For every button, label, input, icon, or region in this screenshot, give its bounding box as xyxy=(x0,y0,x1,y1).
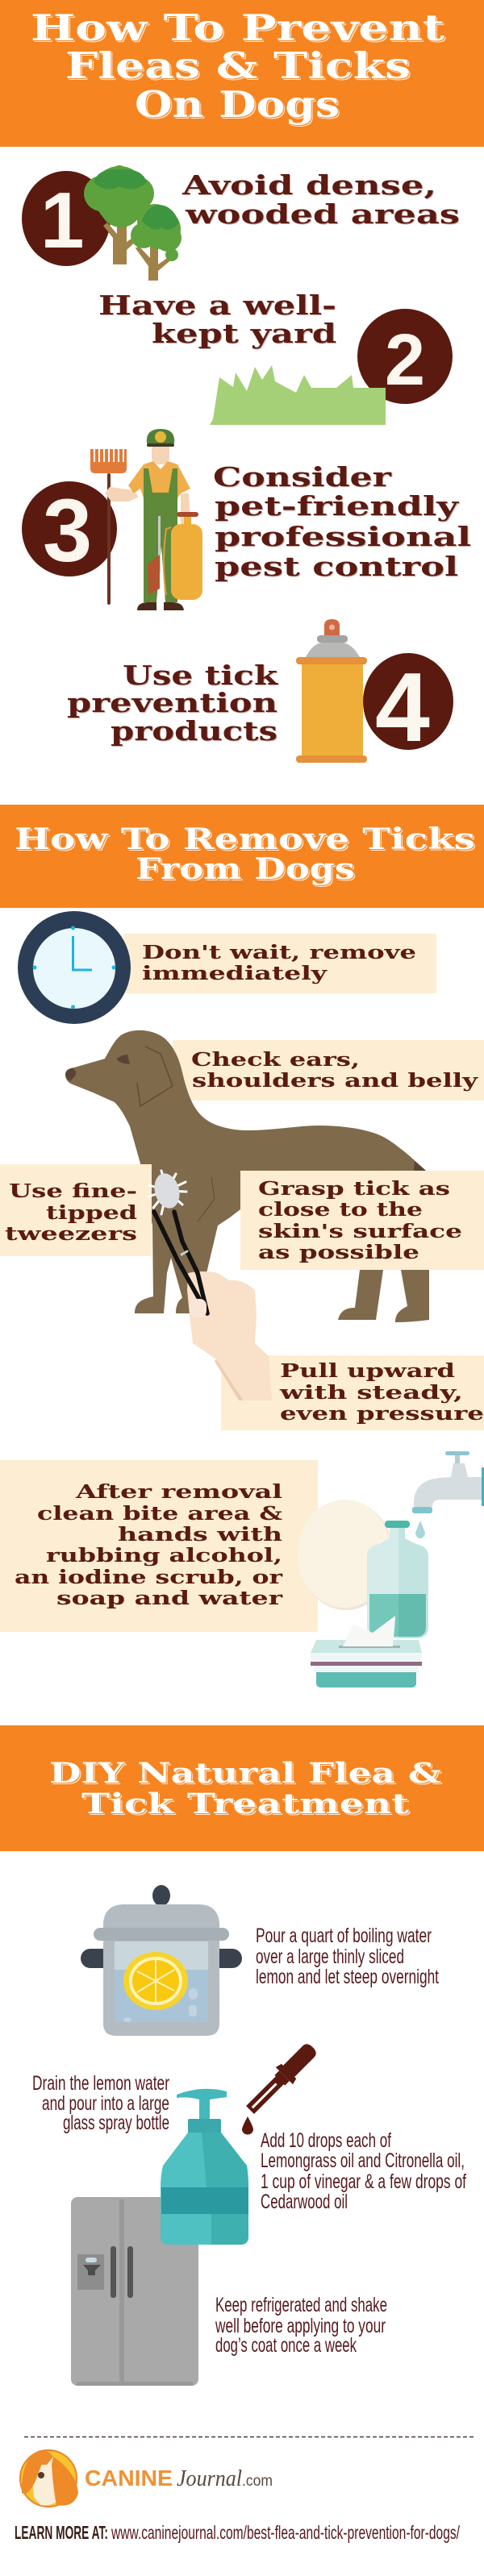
header: DIY treatment xyxy=(0,1725,484,1851)
step 3 text xyxy=(213,461,471,582)
callout: pull upward text: Pull upward xyxy=(280,1360,455,1382)
text: keep refrigerated xyxy=(215,2294,387,2357)
number badge 3 xyxy=(22,481,117,581)
text: drain lemon water: Drain the lemon water xyxy=(32,2072,169,2095)
title xyxy=(15,822,475,886)
callout: check ears text xyxy=(191,1049,478,1092)
callout: don't wait: immediately xyxy=(142,963,328,984)
text: pour boiling water xyxy=(256,1925,439,1988)
icon: spray can xyxy=(296,619,367,763)
logo: Canine Journal: CANINE xyxy=(85,2466,173,2491)
step 4 text: products xyxy=(111,715,277,747)
callout: after removal: clean bite area & xyxy=(37,1503,282,1525)
step 2 text: kept yard xyxy=(152,318,336,349)
tissue box xyxy=(311,1616,422,1688)
title: How To Remove Ticks xyxy=(15,822,475,856)
number badge 2 xyxy=(357,309,453,404)
callout: fine-tipped tweezers: tweezers xyxy=(5,1223,137,1245)
icon: trees xyxy=(84,165,182,281)
dog ear line xyxy=(137,1047,173,1106)
step 3: professional pest control xyxy=(22,429,471,610)
callout: pull upward text: with steady, xyxy=(279,1382,463,1404)
text: keep refrigerated: dog’s coat once a week xyxy=(215,2334,357,2357)
icon: dropper xyxy=(241,2039,321,2135)
text: drain lemon water xyxy=(32,2072,169,2134)
step 3 text: Consider xyxy=(213,461,392,493)
icon: hand xyxy=(187,1271,272,1400)
icon: spray bottle xyxy=(161,2089,248,2245)
callout: after removal: After removal xyxy=(75,1481,282,1503)
icon: refrigerator xyxy=(71,2197,198,2386)
header: remove ticks xyxy=(0,805,484,908)
step 3 text: pet-friendly xyxy=(215,490,459,522)
callout: check ears text: Check ears, xyxy=(191,1049,360,1071)
title: Tick Treatment xyxy=(81,1787,409,1821)
dog eye xyxy=(116,1055,130,1064)
callout: pull upward text: even pressure xyxy=(280,1403,484,1425)
text: add drops xyxy=(261,2129,466,2213)
callout: grasp tick: as possible xyxy=(258,1242,419,1263)
step 2: well-kept yard xyxy=(98,289,453,425)
icon: cleaning supplies xyxy=(298,1451,484,1688)
text: pour boiling water: over a large thinly sliced xyxy=(256,1946,404,1968)
number badge 2: 2 xyxy=(385,320,425,401)
icon: fingertip xyxy=(190,1299,207,1317)
step 3 text: professional xyxy=(215,521,471,552)
callout: grasp tick: skin's surface xyxy=(258,1221,462,1242)
dog tail shade xyxy=(414,1161,426,1171)
logo: Canine Journal: .com xyxy=(242,2473,273,2490)
callout: after removal: soap and water xyxy=(56,1588,283,1609)
callout: don't wait xyxy=(123,934,436,993)
faucet xyxy=(412,1451,484,1538)
callout: grasp tick xyxy=(240,1171,484,1270)
icon: pest control worker xyxy=(90,429,202,610)
step 4 text xyxy=(67,660,278,747)
icon: tweezers xyxy=(154,1212,207,1313)
callout: fine-tipped tweezers xyxy=(0,1164,152,1256)
icon: clock xyxy=(18,911,131,1024)
logo: Canine Journal xyxy=(20,2450,273,2507)
header: prevent fleas and ticks xyxy=(0,0,484,147)
text: drain lemon water: and pour into a large xyxy=(42,2092,169,2115)
illustration: dog xyxy=(65,1030,429,1322)
icon: grass xyxy=(210,365,386,425)
callout: check ears text: shoulders and belly xyxy=(192,1070,478,1092)
footer: learn more: LEARN MORE AT: xyxy=(15,2522,108,2543)
text: keep refrigerated: Keep refrigerated and shake xyxy=(215,2294,387,2316)
title: On Dogs xyxy=(135,83,340,126)
number badge 1 xyxy=(22,171,111,266)
step 2 text: Have a well- xyxy=(98,289,336,321)
step 1: avoid wooded areas xyxy=(22,165,460,281)
step 1 text: Avoid dense, xyxy=(182,169,436,201)
title: How To Prevent xyxy=(31,6,444,49)
callout: don't wait: Don't wait, remove xyxy=(142,942,416,963)
title: Fleas & Ticks xyxy=(65,44,411,87)
callout: fine-tipped tweezers: Use fine- xyxy=(9,1180,137,1202)
callout: after removal xyxy=(0,1460,318,1632)
callout: fine-tipped tweezers: tipped xyxy=(46,1202,137,1224)
text: add drops: Add 10 drops each of xyxy=(261,2129,391,2152)
step 1 text: wooded areas xyxy=(185,198,460,230)
logo: Canine Journal: Journal xyxy=(177,2466,242,2491)
callout: pull upward box xyxy=(221,1355,484,1430)
icon: pot with lemon xyxy=(81,1885,242,2036)
lemon slice xyxy=(123,1952,188,2010)
title: DIY Natural Flea & xyxy=(49,1757,441,1790)
glass bottle xyxy=(367,1521,428,1638)
title: From Dogs xyxy=(136,852,355,886)
callout: after removal: rubbing alcohol, xyxy=(46,1545,282,1567)
icon: tick xyxy=(148,1171,186,1214)
callout: grasp tick: close to the xyxy=(258,1199,423,1221)
number badge 4: 4 xyxy=(375,652,430,762)
text: drain lemon water: glass spray bottle xyxy=(63,2112,169,2134)
dog nose xyxy=(65,1068,76,1081)
number badge 4 xyxy=(363,652,453,762)
step 4: tick prevention products xyxy=(67,619,453,763)
sponge xyxy=(298,1500,394,1610)
step 1 text xyxy=(182,169,460,230)
callout: pull upward text xyxy=(279,1360,484,1425)
step 3 text: pest control xyxy=(215,551,458,582)
callout: grasp tick: Grasp tick as xyxy=(258,1178,450,1200)
number badge 1: 1 xyxy=(40,176,85,264)
text: keep refrigerated: well before applying to your xyxy=(215,2315,386,2337)
number badge 3: 3 xyxy=(43,481,92,581)
logo dog badge xyxy=(20,2450,78,2507)
step 4 text: prevention xyxy=(67,687,277,718)
callout: after removal: hands with xyxy=(118,1524,282,1546)
step 2 text xyxy=(98,289,336,349)
title xyxy=(49,1757,441,1821)
text: add drops: Cedarwood oil xyxy=(261,2191,348,2213)
callout: check ears box xyxy=(173,1040,484,1101)
callout: after removal: an iodine scrub, or xyxy=(15,1567,283,1588)
title xyxy=(31,6,444,126)
step 4 text: Use tick xyxy=(123,660,278,691)
